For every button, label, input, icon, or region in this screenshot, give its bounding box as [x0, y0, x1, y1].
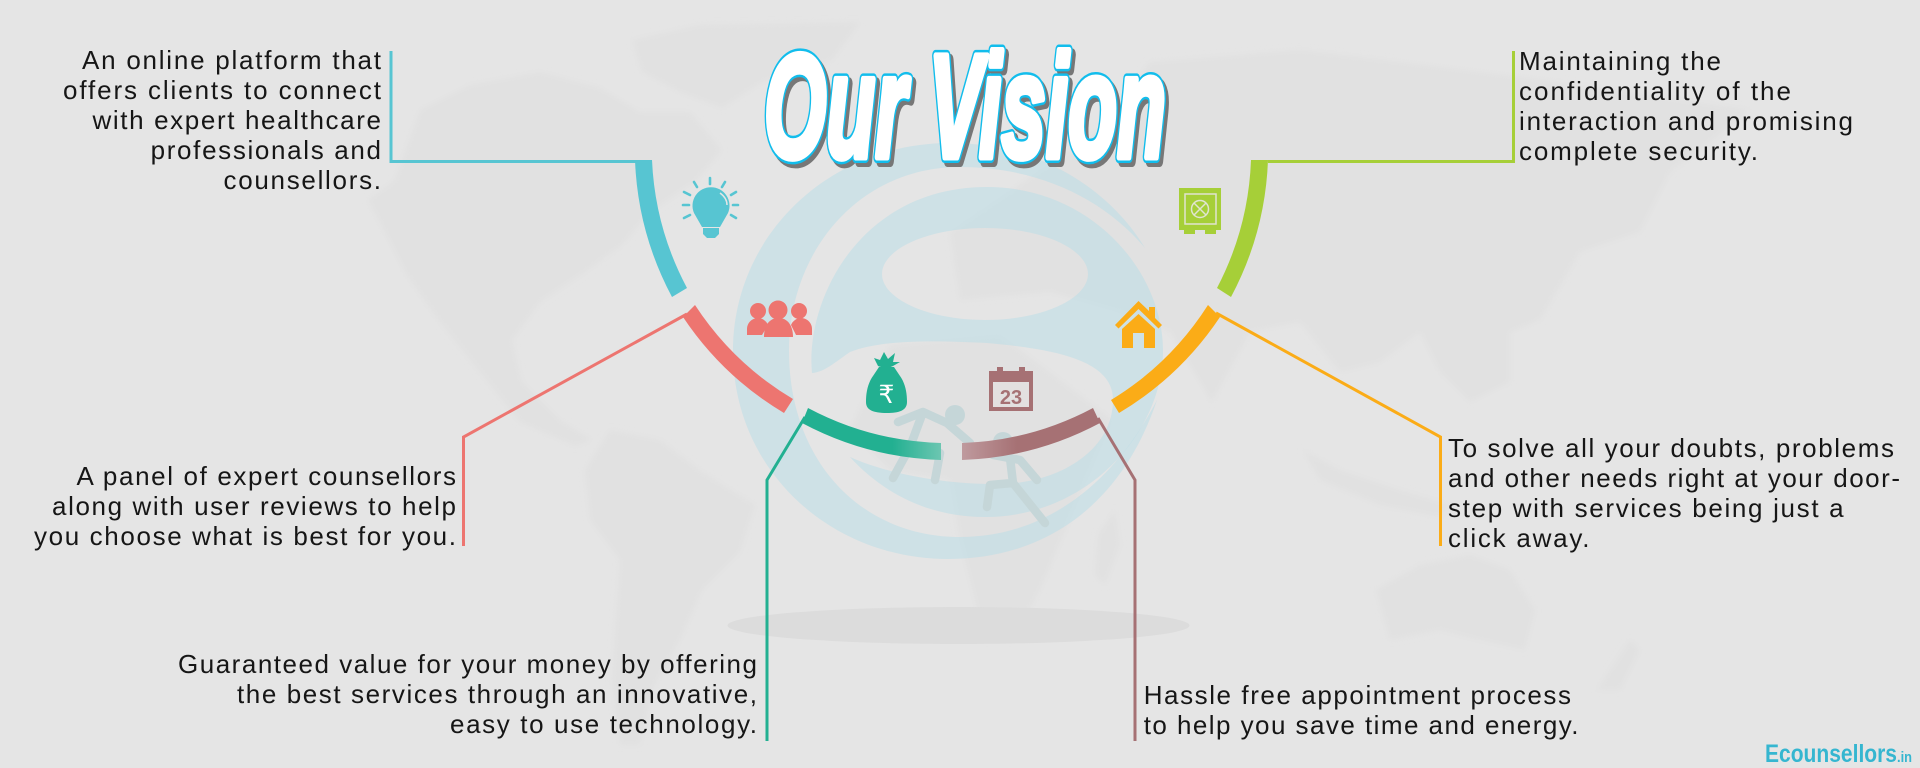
icon: calendar: 23 [1000, 387, 1022, 409]
panel: expert panel [34, 300, 812, 551]
ground shadow ellipse [728, 607, 1190, 644]
text: appointment: to help you save time and energy. [1144, 710, 1578, 740]
text: value for money: easy to use technology. [450, 709, 757, 739]
arc and connector: blue [391, 51, 687, 297]
text: door-step services [1448, 433, 1900, 553]
text: online platform: professionals and [151, 135, 381, 165]
text: confidentiality: complete security. [1519, 136, 1758, 166]
panel: confidentiality [1179, 46, 1853, 297]
runner figure left [893, 405, 970, 480]
text: online platform: counsellors. [224, 165, 381, 195]
text: door-step services: click away. [1448, 523, 1590, 553]
icon: light bulb [683, 178, 738, 238]
arc and connector: mauve [962, 408, 1135, 741]
icon: rupee money bag [866, 352, 907, 413]
text: value for money: Guaranteed value for your money by offering [178, 649, 757, 679]
text: confidentiality: interaction and promising [1519, 106, 1853, 136]
panel: online platform [63, 45, 738, 297]
brand: Ecounsellors.in: .in [1897, 749, 1912, 766]
text: door-step services: and other needs right at your door- [1448, 463, 1900, 493]
arc and connector: lime [1217, 51, 1514, 297]
text: online platform [63, 45, 382, 195]
icon: safe [1179, 188, 1221, 234]
panel: appointment [962, 367, 1578, 741]
icon: rupee money bag: ₹ [879, 375, 894, 411]
text: expert panel: along with user reviews to help [52, 491, 456, 521]
arc and connector: green [767, 408, 941, 741]
logo watermark [733, 143, 1163, 559]
text: value for money [178, 649, 757, 739]
runner figure right [987, 432, 1045, 523]
text: online platform: with expert healthcare [92, 105, 381, 135]
title: Our Vision: Our Vision [764, 25, 1166, 189]
background world map [368, 22, 1750, 745]
icon: people [747, 300, 812, 337]
text: online platform: offers clients to connect [63, 75, 382, 105]
text: door-step services: To solve all your doubts, problems [1448, 433, 1894, 463]
panel: value for money [178, 352, 941, 741]
title: Our Vision: Our Vision [767, 29, 1169, 193]
icon: calendar [989, 367, 1033, 411]
text: confidentiality: confidentiality of the [1519, 76, 1791, 106]
text: appointment: Hassle free appointment process [1144, 680, 1571, 710]
text: online platform: An online platform that [82, 45, 382, 75]
text: expert panel [34, 461, 456, 551]
arc and connector: coral [464, 305, 793, 546]
text: expert panel: A panel of expert counsellors [76, 461, 456, 491]
title: Our Vision: Our Vision [764, 25, 1166, 189]
arc and connector: orange [1111, 305, 1440, 546]
icon: house [1115, 301, 1162, 348]
brand: Ecounsellors.in: Ecounsellors [1765, 740, 1897, 768]
text: appointment [1144, 680, 1578, 740]
text: confidentiality [1519, 46, 1853, 166]
text: value for money: the best services through an innovative, [237, 679, 757, 709]
panel: door-step services [1111, 301, 1900, 553]
text: confidentiality: Maintaining the [1519, 46, 1721, 76]
text: door-step services: step with services being just a [1448, 493, 1844, 523]
text: expert panel: you choose what is best for you. [34, 521, 456, 551]
